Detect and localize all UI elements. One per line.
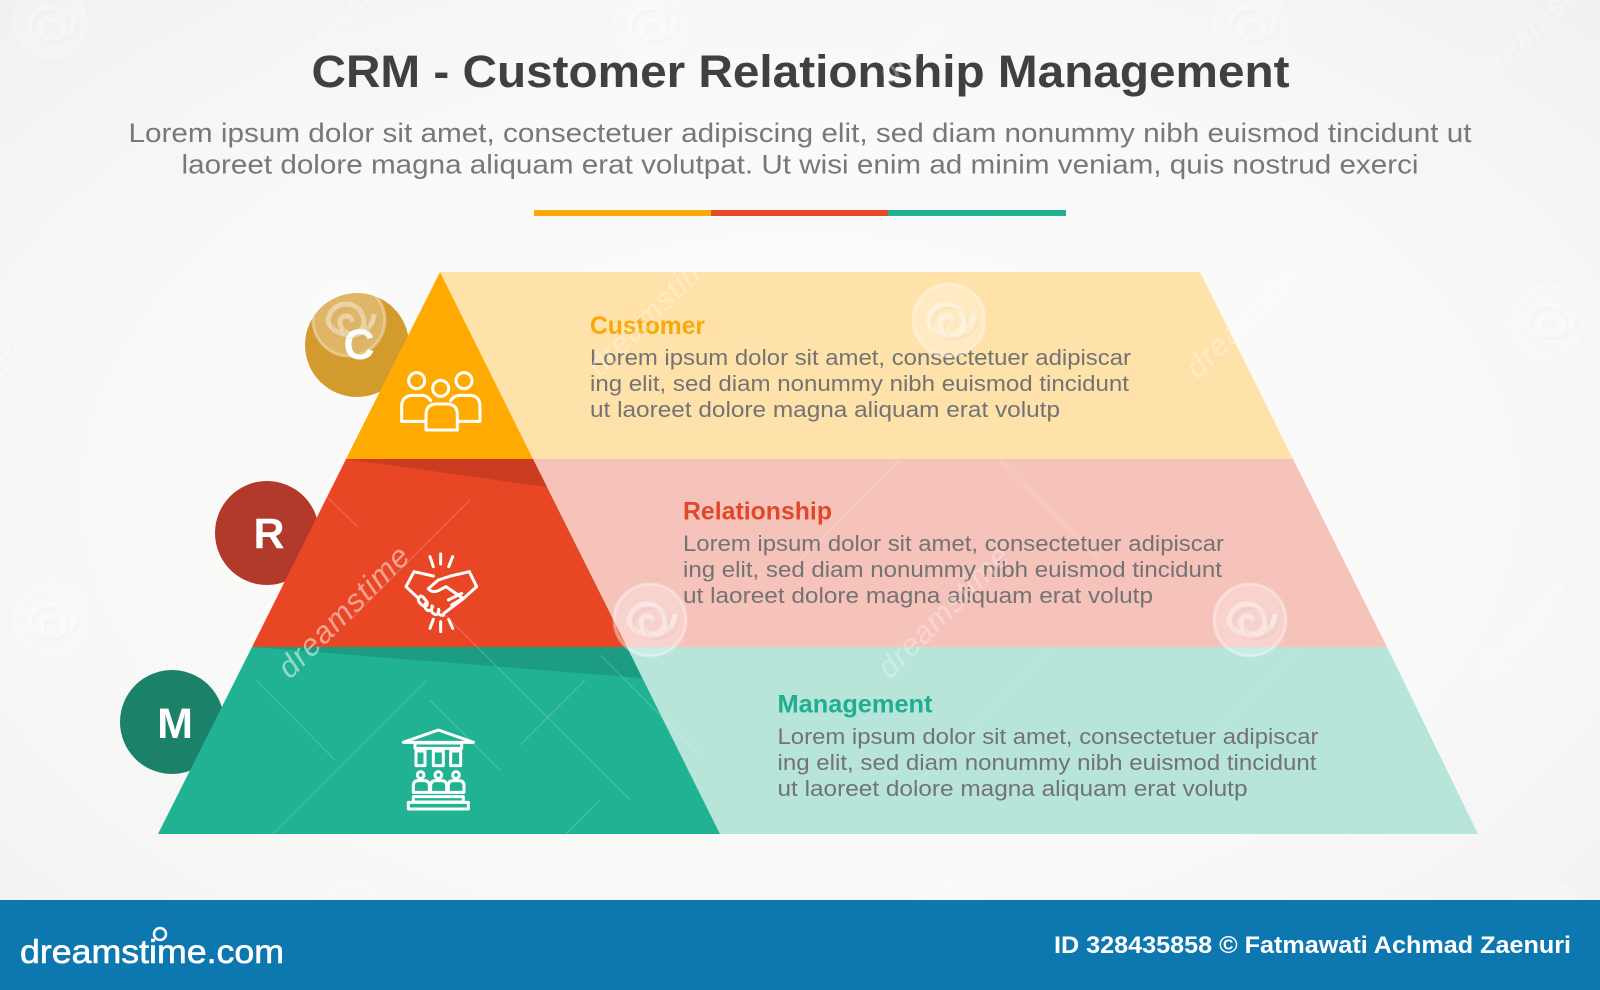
- pyramid tier: management: [158, 647, 720, 834]
- footer logo: dreamstime.com: [20, 933, 284, 970]
- body: management: Lorem ipsum dolor sit amet, consectetuer adipiscar: [778, 724, 1318, 749]
- body: relationship: [683, 531, 1224, 608]
- subtitle text block: [128, 118, 1472, 180]
- watermark text: [0, 0, 1600, 685]
- heading: management: Management: [778, 690, 933, 718]
- circle badge R: [215, 481, 319, 585]
- pyramid tier: customer: [346, 272, 533, 459]
- text block: management: [778, 690, 1318, 801]
- tricolor divider bar: [534, 210, 1066, 216]
- heading: relationship: Relationship: [683, 498, 832, 526]
- subtitle text block: Lorem ipsum dolor sit amet, consectetuer adipiscing elit, sed diam nonummy nibh euismod tincidunt ut: [128, 118, 1472, 148]
- watermark text: dreamstime: [870, 539, 1017, 685]
- circle badge C: [305, 293, 409, 397]
- body: customer: ing elit, sed diam nonummy nibh euismod tincidunt: [590, 371, 1129, 396]
- watermark text: dreamstime: [1178, 239, 1325, 385]
- panel: customer band: [440, 272, 1293, 459]
- footer bar: [0, 900, 1600, 990]
- body: relationship: ing elit, sed diam nonummy nibh euismod tincidunt: [683, 557, 1222, 582]
- body: customer: Lorem ipsum dolor sit amet, consectetuer adipiscar: [590, 345, 1131, 370]
- circle badge C: C: [343, 321, 375, 369]
- circle badge M: M: [157, 700, 193, 748]
- pyramid tier: relationship: [252, 459, 627, 647]
- text block: customer: [590, 312, 1131, 422]
- title: CRM - Customer Relationship Management: [312, 46, 1290, 97]
- panel: management band: [627, 647, 1478, 834]
- body: customer: ut laoreet dolore magna aliquam erat volutp: [590, 397, 1060, 422]
- body: management: ing elit, sed diam nonummy nibh euismod tincidunt: [778, 750, 1316, 775]
- body: relationship: Lorem ipsum dolor sit amet, consectetuer adipiscar: [683, 531, 1224, 556]
- watermark text: dreamstime: [270, 539, 417, 685]
- watermark text: dreamstime: [580, 237, 727, 383]
- footer credit: ID 328435858 © Fatmawati Achmad Zaenuri: [1054, 932, 1571, 959]
- text block: relationship: [683, 498, 1224, 608]
- body: management: ut laoreet dolore magna aliquam erat volutp: [778, 776, 1248, 801]
- icon: customers group: [402, 373, 480, 430]
- body: customer: [590, 345, 1131, 422]
- circle badge R: R: [253, 510, 285, 558]
- icon: handshake: [406, 554, 477, 632]
- subtitle text block: laoreet dolore magna aliquam erat volutpat. Ut wisi enim ad minim veniam, quis nostrud exerci: [182, 150, 1418, 180]
- heading: customer: Customer: [590, 312, 705, 340]
- body: relationship: ut laoreet dolore magna aliquam erat volutp: [683, 583, 1153, 608]
- panel: relationship band: [533, 459, 1387, 647]
- circle badge M: [120, 670, 224, 774]
- icon: institution building: [403, 730, 473, 809]
- body: management: [778, 724, 1318, 801]
